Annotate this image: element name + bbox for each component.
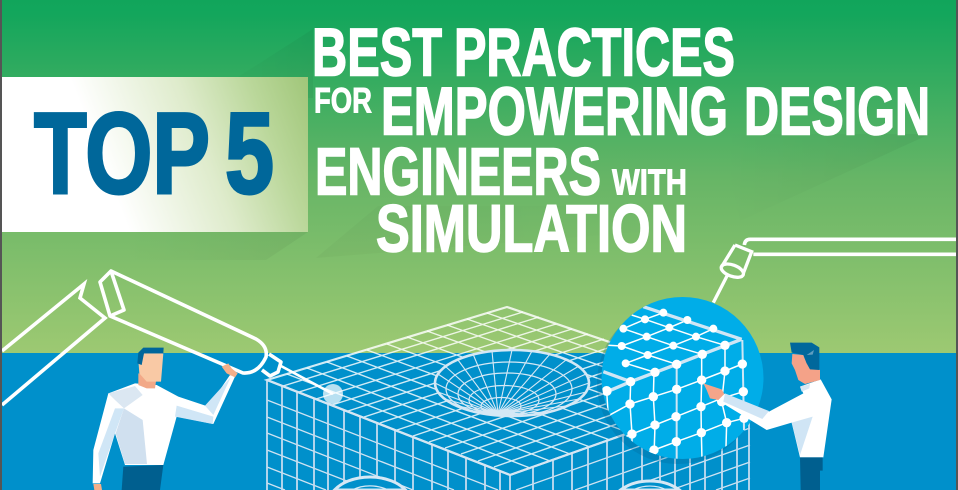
pointing hand xyxy=(703,383,724,400)
mesh block xyxy=(267,307,750,490)
lower right crater xyxy=(621,481,679,490)
shirt xyxy=(93,375,235,483)
background shadow shapes xyxy=(120,29,930,260)
TOP 5 label: TOP xyxy=(34,90,210,218)
hair highlight xyxy=(807,350,814,355)
magnifier shadow xyxy=(597,302,759,464)
syringe barrel xyxy=(100,271,266,373)
shirt body xyxy=(718,379,832,457)
title: WITH xyxy=(612,162,687,202)
lower hand xyxy=(93,484,102,490)
mesh nodes xyxy=(602,309,749,455)
green gradient background xyxy=(0,0,958,353)
magnifier circle xyxy=(602,297,764,459)
left syringe xyxy=(100,271,333,394)
title: ENGINEERS xyxy=(315,134,601,210)
magnified node mesh xyxy=(602,307,749,460)
title: PRACTICES xyxy=(454,14,735,90)
hair xyxy=(790,343,819,370)
TOP 5 banner xyxy=(2,77,308,232)
side face grid xyxy=(267,400,750,490)
title xyxy=(312,14,930,266)
neck xyxy=(138,373,157,388)
sleeve shade xyxy=(98,408,124,477)
collar shade xyxy=(108,386,143,408)
needle tip ball xyxy=(323,384,343,404)
forearm xyxy=(723,393,769,419)
hair xyxy=(137,348,164,365)
upper arm shade xyxy=(175,406,213,424)
TOP 5 label: 5 xyxy=(225,90,274,218)
left engineer xyxy=(93,348,238,490)
left syringe arm xyxy=(2,284,105,405)
crater radial lines xyxy=(435,350,589,414)
needle xyxy=(281,366,333,394)
right probe xyxy=(713,239,956,303)
face xyxy=(138,353,163,382)
probe head xyxy=(722,245,752,273)
lower left crater xyxy=(334,477,406,490)
raised hand xyxy=(222,363,238,377)
trousers xyxy=(122,465,163,490)
shirt shade xyxy=(792,417,813,455)
title: SIMULATION xyxy=(376,192,687,266)
title: FOR xyxy=(314,82,372,120)
mesh struts xyxy=(603,313,744,460)
torso shade xyxy=(116,408,147,464)
probe needle xyxy=(713,273,728,303)
collar xyxy=(800,384,810,392)
neck and face xyxy=(792,354,820,384)
top face outline xyxy=(267,307,750,475)
barrel end cap xyxy=(110,271,124,316)
left edge strip xyxy=(0,0,2,490)
mesh heavy edges xyxy=(603,307,742,393)
nozzle xyxy=(262,354,281,376)
right edge strip xyxy=(956,0,958,490)
crater rings xyxy=(446,362,572,416)
blue lower background xyxy=(0,353,958,490)
top face grid xyxy=(283,312,734,468)
funnel crater top xyxy=(435,350,589,416)
title: BEST xyxy=(312,14,442,90)
trousers xyxy=(800,457,823,490)
probe arm xyxy=(744,239,956,254)
forearm shade xyxy=(205,377,231,415)
right engineer xyxy=(703,343,832,490)
title: EMPOWERING xyxy=(381,74,728,150)
